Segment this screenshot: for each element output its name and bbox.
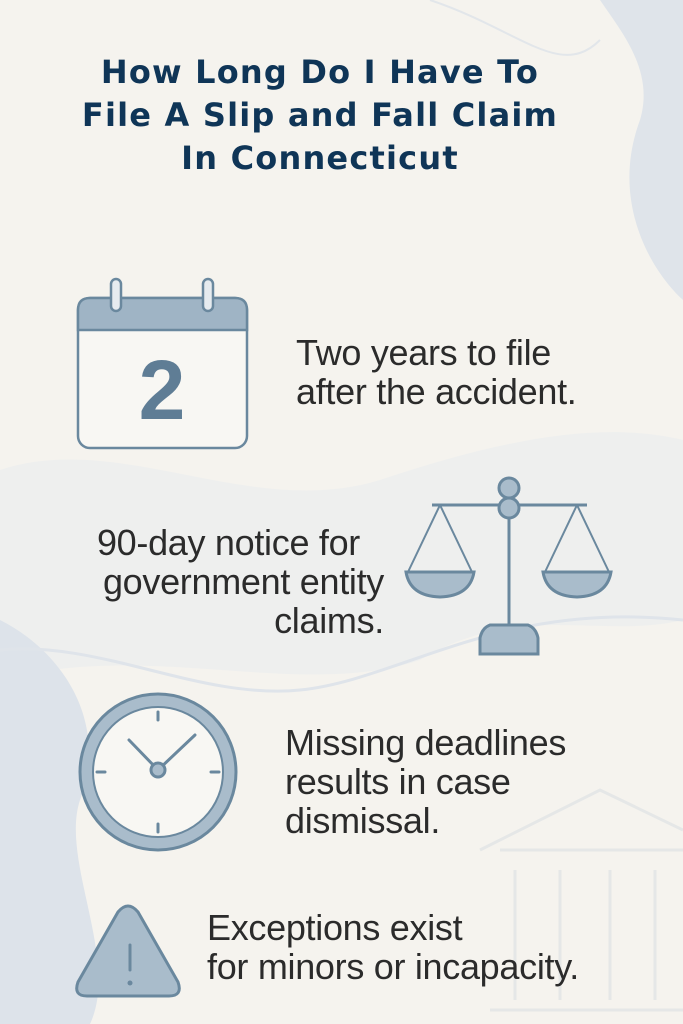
text: missing deadlines xyxy=(285,722,566,841)
icon: scales xyxy=(404,476,613,656)
title: In Connecticut xyxy=(181,139,459,177)
text: missing deadlines: results in case xyxy=(285,761,511,802)
text: exceptions xyxy=(207,907,579,987)
text: exceptions: Exceptions exist xyxy=(207,907,462,948)
title xyxy=(82,53,558,177)
icon: clock xyxy=(78,692,238,852)
text: two years xyxy=(296,332,576,412)
icon: calendar: 2 xyxy=(139,343,185,437)
text: two years: Two years to file xyxy=(296,332,551,373)
text: 90-day notice xyxy=(97,522,384,641)
text: 90-day notice: government entity xyxy=(103,561,384,602)
title: File A Slip and Fall Claim xyxy=(82,96,558,134)
icon: calendar xyxy=(76,278,248,450)
text: 90-day notice: claims. xyxy=(274,600,384,641)
title: How Long Do I Have To xyxy=(101,53,539,91)
text: missing deadlines: Missing deadlines xyxy=(285,722,566,763)
text: exceptions: for minors or incapacity. xyxy=(207,946,579,987)
text: missing deadlines: dismissal. xyxy=(285,800,440,841)
text: two years: after the accident. xyxy=(296,371,576,412)
icon: warning triangle xyxy=(75,904,181,998)
text: 90-day notice: 90-day notice for xyxy=(97,522,360,563)
